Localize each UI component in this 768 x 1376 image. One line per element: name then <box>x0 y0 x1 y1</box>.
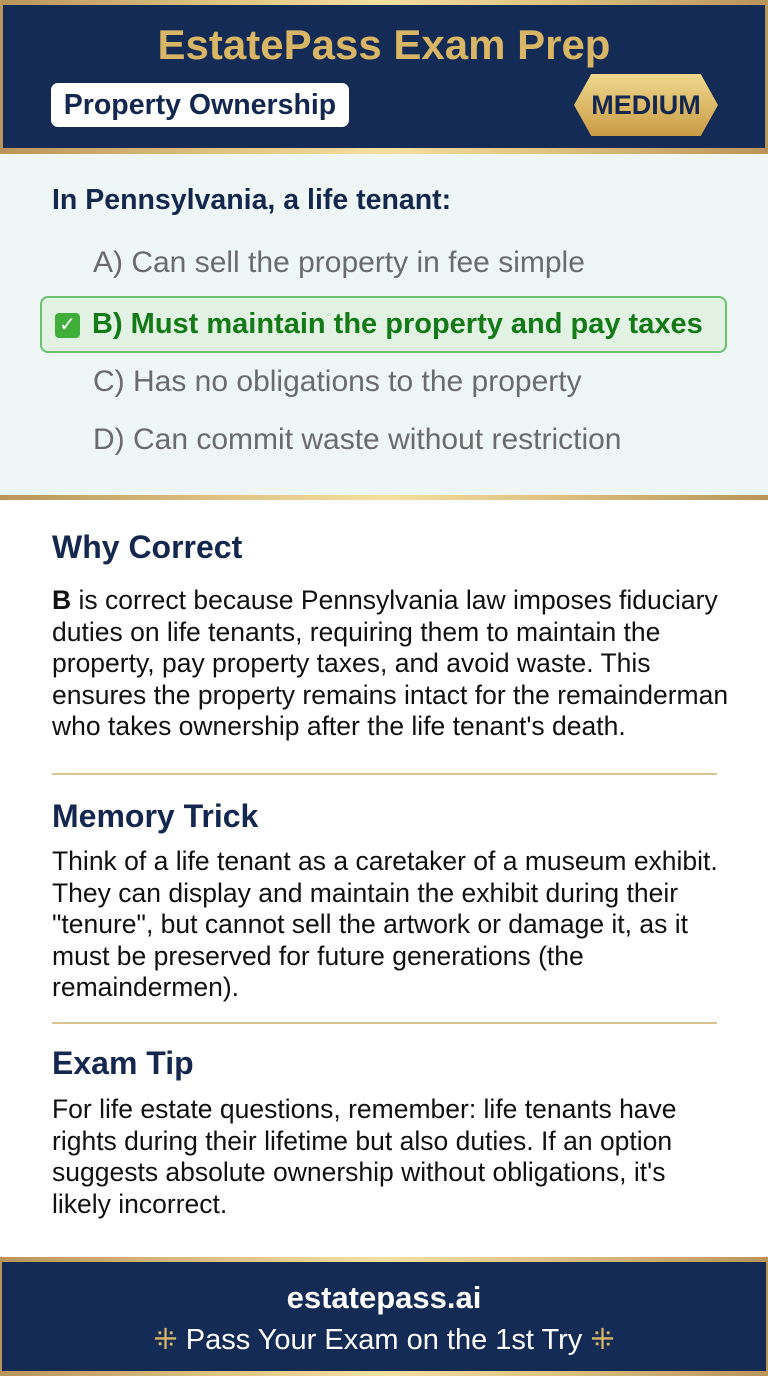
heading: exam tip: Exam Tip <box>52 1045 194 1081</box>
panel: question <box>0 154 768 500</box>
option D: D) Can commit waste without restriction <box>93 423 622 456</box>
footer tagline: ⁜ Pass Your Exam on the 1st Try ⁜ <box>153 1324 615 1356</box>
header <box>0 0 768 154</box>
heading: memory trick: Memory Trick <box>52 798 258 834</box>
text: memory trick: Think of a life tenant as a caretaker of a museum exhibit. <box>52 846 718 876</box>
text: why correct <box>52 585 728 741</box>
option B correct <box>40 296 727 353</box>
text: exam tip: For life estate questions, remember: life tenants have <box>52 1094 677 1124</box>
text: why correct: who takes ownership after the life tenant's death. <box>52 711 626 741</box>
text: memory trick: They can display and maintain the exhibit during their <box>52 878 678 908</box>
option C: C) Has no obligations to the property <box>93 365 582 398</box>
text: why correct: B is correct because Pennsylvania law imposes fiduciary <box>52 585 718 615</box>
difficulty badge: MEDIUM <box>591 90 701 120</box>
text: why correct: ensures the property remains intact for the remainderman <box>52 680 728 710</box>
text: memory trick <box>52 846 718 1002</box>
option B correct: B) Must maintain the property and pay taxes <box>92 308 703 340</box>
text: exam tip: likely incorrect. <box>52 1188 227 1218</box>
text: memory trick: must be preserved for future generations (the <box>52 940 584 970</box>
heading: why correct: Why Correct <box>52 529 242 565</box>
footer site: estatepass.ai <box>287 1280 481 1315</box>
text: memory trick: remaindermen). <box>52 972 239 1002</box>
option A: A) Can sell the property in fee simple <box>93 246 585 279</box>
text: why correct: duties on life tenants, requiring them to maintain the <box>52 616 660 646</box>
icon: check <box>55 313 80 338</box>
text: memory trick: "tenure", but cannot sell the artwork or damage it, as it <box>52 909 688 939</box>
icon: check: ✓ <box>59 314 76 336</box>
footer <box>0 1257 768 1376</box>
question heading: In Pennsylvania, a life tenant: <box>52 184 451 216</box>
text: exam tip <box>52 1094 677 1218</box>
difficulty badge <box>574 74 718 136</box>
category pill: Property Ownership <box>64 89 336 121</box>
text: why correct: property, pay property taxes, and avoid waste. This <box>52 648 651 678</box>
text: exam tip: rights during their lifetime but also duties. If an option <box>52 1126 672 1156</box>
title: EstatePass Exam Prep <box>158 21 610 68</box>
category pill <box>51 83 349 127</box>
text: exam tip: suggests absolute ownership without obligations, it's <box>52 1157 665 1187</box>
